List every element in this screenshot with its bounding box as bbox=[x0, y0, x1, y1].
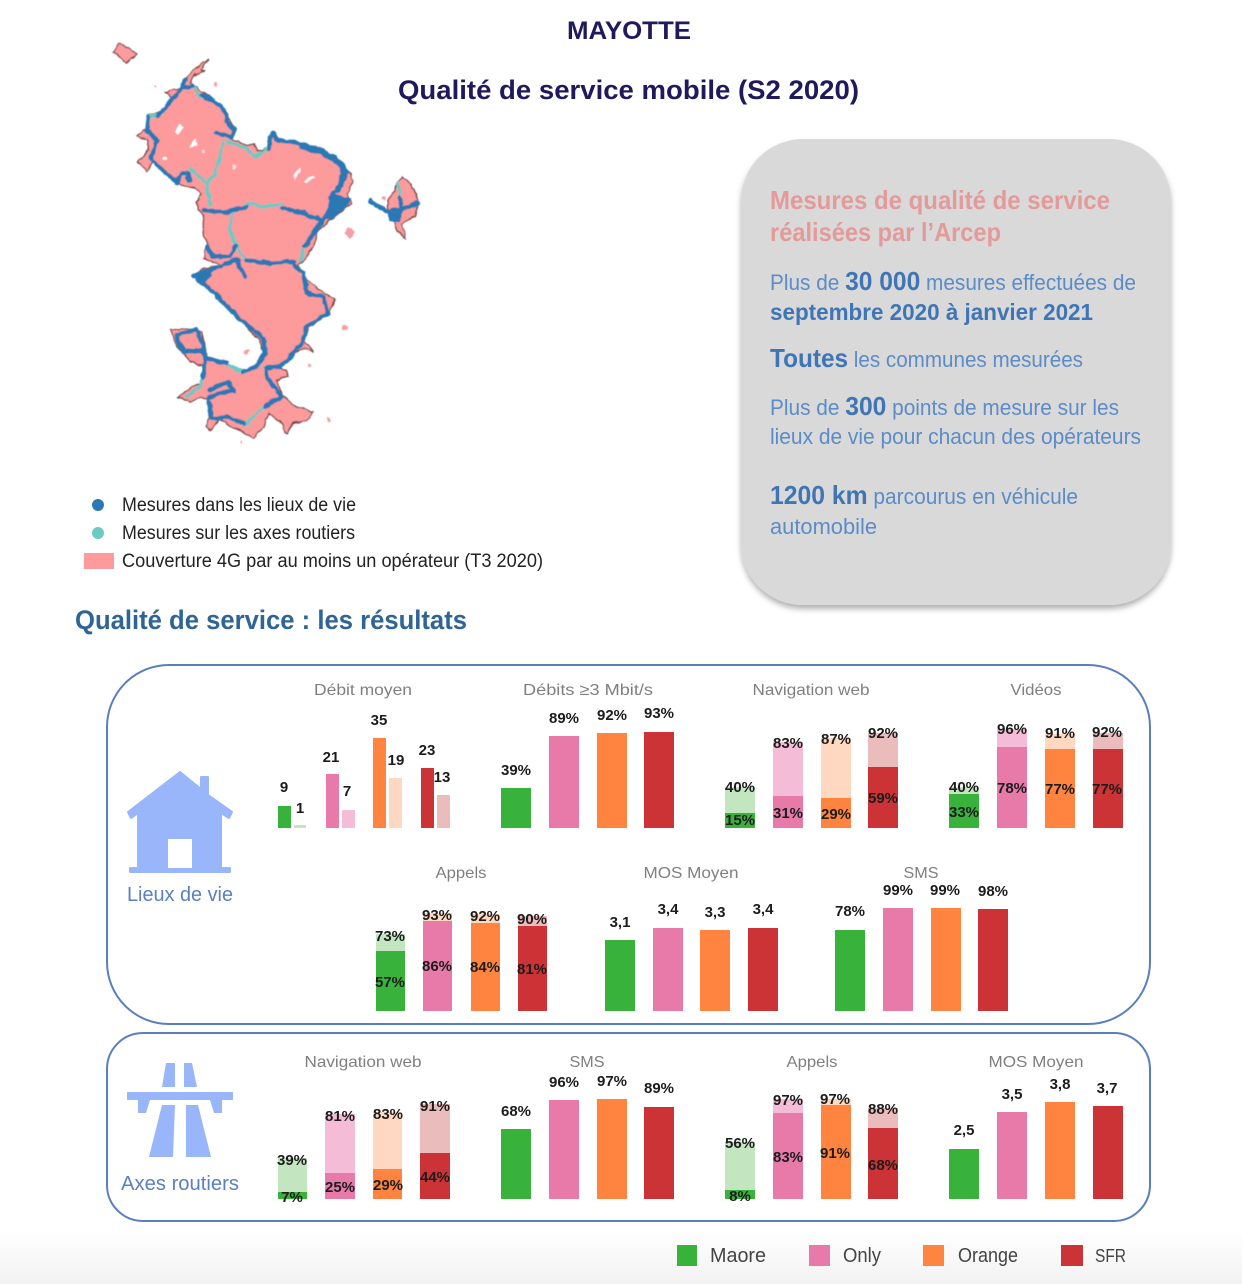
chart: MOS Moyen bbox=[605, 865, 778, 1011]
chart: Navigation web routes bbox=[277, 1054, 450, 1206]
chart: Vidéos bbox=[949, 682, 1123, 828]
road measurements bbox=[148, 87, 400, 425]
chart: MOS Moyen: 3,1 bbox=[610, 914, 630, 931]
chart: Navigation web routes: 39% bbox=[277, 1152, 307, 1169]
chart: Débit moyen: 7 bbox=[343, 783, 351, 800]
white gaps in coverage bbox=[163, 124, 316, 184]
chart: MOS Moyen routes: 2,5 bbox=[954, 1122, 974, 1139]
chart: Appels: 92% bbox=[470, 908, 500, 925]
chart: Vidéos: 78% bbox=[997, 780, 1027, 797]
chart: Débits 3 Mbit/s: 89% bbox=[549, 710, 579, 727]
chart: MOS Moyen routes: 3,5 bbox=[1002, 1086, 1022, 1103]
chart: Navigation web bbox=[725, 682, 898, 829]
chart: Débit moyen: 21 bbox=[323, 749, 339, 766]
chart: Appels: Appels bbox=[436, 865, 486, 882]
chart: Appels routes: 91% bbox=[820, 1145, 850, 1162]
chart: Appels: 84% bbox=[470, 959, 500, 976]
chart: Appels bbox=[375, 865, 547, 1011]
legend: 4G coverage: Couverture 4G par au moins un opérateur (T3 2020) bbox=[122, 551, 543, 572]
chart: Appels: 90% bbox=[517, 911, 547, 928]
chart: Appels routes: 97% bbox=[773, 1092, 803, 1109]
legend: SFR: SFR bbox=[1095, 1246, 1126, 1266]
chart: Navigation web routes: 91% bbox=[420, 1098, 450, 1115]
chart: Vidéos: 96% bbox=[997, 721, 1027, 738]
chart: Débits 3 Mbit/s: Débits ≥3 Mbit/s bbox=[523, 682, 653, 699]
label: Axes routiers: Axes routiers bbox=[121, 1173, 239, 1195]
chart: Navigation web: 87% bbox=[821, 731, 851, 748]
legend: roads: Mesures sur les axes routiers bbox=[122, 523, 355, 544]
panel: lieux de vie bbox=[107, 665, 1150, 1024]
chart: Vidéos: Vidéos bbox=[1010, 682, 1062, 699]
chart: MOS Moyen routes: MOS Moyen bbox=[988, 1054, 1084, 1071]
chart: SMS: 98% bbox=[978, 883, 1008, 900]
chart: Appels routes: 56% bbox=[725, 1135, 755, 1152]
chart: Appels routes bbox=[725, 1054, 898, 1205]
chart: Navigation web: 31% bbox=[773, 805, 803, 822]
chart: Appels routes: 88% bbox=[868, 1101, 898, 1118]
chart: Navigation web routes: 81% bbox=[325, 1108, 355, 1125]
chart: SMS routes: SMS bbox=[570, 1054, 604, 1071]
legend: Only: Only bbox=[843, 1245, 881, 1267]
chart: Vidéos: 77% bbox=[1045, 781, 1075, 798]
chart: Navigation web: 83% bbox=[773, 735, 803, 752]
fact: 30 000 measurements bbox=[770, 266, 1136, 325]
chart: Navigation web: Navigation web bbox=[752, 682, 870, 699]
chart: Appels routes: 8% bbox=[729, 1188, 751, 1205]
chart: Navigation web routes: 83% bbox=[373, 1106, 403, 1123]
icon: house bbox=[128, 772, 232, 872]
fact: 300 points: lieux de vie pour chacun des opérateurs bbox=[770, 424, 1141, 449]
chart: Navigation web routes: 44% bbox=[420, 1169, 450, 1186]
chart: Vidéos: 33% bbox=[949, 804, 979, 821]
legend: living places: Mesures dans les lieux de vie bbox=[122, 495, 356, 516]
chart: Débits 3 Mbit/s: 39% bbox=[501, 762, 531, 779]
chart: Navigation web routes: Navigation web bbox=[304, 1054, 422, 1071]
chart: Navigation web routes: 7% bbox=[281, 1189, 303, 1206]
chart: Navigation web: 59% bbox=[868, 790, 898, 807]
chart: MOS Moyen: 3,4 bbox=[658, 901, 679, 918]
chart: Appels: 93% bbox=[422, 907, 452, 924]
chart: Appels routes: Appels bbox=[786, 1054, 838, 1071]
chart: SMS routes: 68% bbox=[501, 1103, 531, 1120]
main island coverage bbox=[137, 59, 353, 438]
chart: Appels routes: 68% bbox=[868, 1157, 898, 1174]
chart: Débit moyen: 1 bbox=[296, 800, 304, 817]
chart: Débit moyen: 23 bbox=[419, 742, 435, 759]
chart: Navigation web: 40% bbox=[725, 779, 755, 796]
icon: motorway bbox=[127, 1063, 233, 1157]
fact: all communes: Toutes les communes mesurées bbox=[770, 343, 1083, 373]
chart: Débits 3 Mbit/s bbox=[501, 682, 674, 828]
map of Mayotte bbox=[113, 43, 418, 444]
legend: Orange bbox=[923, 1245, 1018, 1267]
chart: Navigation web routes: 29% bbox=[373, 1177, 403, 1194]
chart: SMS routes: 97% bbox=[597, 1073, 627, 1090]
chart: MOS Moyen: MOS Moyen bbox=[644, 865, 738, 882]
title: Mayotte: MAYOTTE bbox=[567, 17, 691, 45]
chart: Navigation web: 15% bbox=[725, 812, 755, 829]
chart: Débit moyen: 13 bbox=[434, 769, 450, 786]
chart: MOS Moyen routes: 3,8 bbox=[1050, 1076, 1070, 1093]
chart: Appels routes: 97% bbox=[820, 1091, 850, 1108]
chart: MOS Moyen: 3,3 bbox=[705, 904, 725, 921]
chart: SMS bbox=[835, 865, 1008, 1011]
chart: Appels: 57% bbox=[375, 974, 405, 991]
chart: SMS: 99% bbox=[930, 882, 960, 899]
section heading: Qualité de service : les résultats bbox=[75, 605, 467, 635]
chart: Appels: 73% bbox=[375, 928, 405, 945]
chart: SMS routes: 89% bbox=[644, 1080, 674, 1097]
chart: Appels routes: 83% bbox=[773, 1149, 803, 1166]
chart: MOS Moyen routes bbox=[949, 1054, 1123, 1199]
panel heading: Mesures de qualité de service bbox=[770, 185, 1110, 215]
legend: SFR bbox=[1061, 1245, 1126, 1266]
small islets bbox=[154, 82, 387, 444]
fact: 30 000 measurements: Plus de 30 000 mesures effectuées de bbox=[770, 266, 1136, 296]
chart: Vidéos: 92% bbox=[1092, 724, 1122, 741]
fact: 300 points bbox=[770, 391, 1141, 449]
chart: SMS routes: 96% bbox=[549, 1074, 579, 1091]
chart: Débit moyen: 9 bbox=[280, 779, 288, 796]
legend: Maore bbox=[677, 1245, 766, 1267]
chart: Vidéos: 40% bbox=[949, 779, 979, 796]
map legend bbox=[84, 495, 543, 572]
Petite-Terre bbox=[387, 176, 418, 238]
subtitle: Qualité de service mobile (S2 2020) bbox=[398, 75, 859, 105]
chart: Appels: 81% bbox=[517, 961, 547, 978]
islet north-west bbox=[113, 43, 137, 63]
chart: Débit moyen bbox=[278, 682, 450, 828]
chart: Débit moyen: 19 bbox=[388, 752, 404, 769]
chart: Débit moyen: Débit moyen bbox=[314, 682, 412, 699]
fact: 300 points: Plus de 300 points de mesure sur les bbox=[770, 391, 1119, 421]
chart: Débits 3 Mbit/s: 93% bbox=[644, 705, 674, 722]
chart: SMS routes bbox=[501, 1054, 674, 1199]
panel: Arcep measurements bbox=[741, 139, 1171, 605]
panel heading: réalisées par l’Arcep bbox=[770, 217, 1001, 247]
chart: SMS: SMS bbox=[904, 865, 938, 882]
chart: SMS: 78% bbox=[835, 903, 865, 920]
fact: 1200 km bbox=[770, 480, 1078, 539]
chart: Navigation web: 29% bbox=[821, 806, 851, 823]
living-place measurements bbox=[147, 80, 418, 423]
chart: Vidéos: 77% bbox=[1092, 781, 1122, 798]
operator legend bbox=[677, 1245, 1126, 1267]
legend: Only bbox=[809, 1245, 881, 1267]
panel heading bbox=[770, 185, 1110, 247]
chart: Débit moyen: 35 bbox=[371, 712, 387, 729]
fact: 30 000 measurements: septembre 2020 à janvier 2021 bbox=[770, 299, 1093, 325]
chart: Appels: 86% bbox=[422, 958, 452, 975]
chart: SMS: 99% bbox=[883, 882, 913, 899]
chart: Navigation web: 92% bbox=[868, 725, 898, 742]
chart: MOS Moyen routes: 3,7 bbox=[1097, 1080, 1117, 1097]
chart: Débits 3 Mbit/s: 92% bbox=[597, 707, 627, 724]
panel: axes routiers bbox=[107, 1033, 1150, 1221]
label: Lieux de vie: Lieux de vie bbox=[127, 884, 233, 906]
chart: MOS Moyen: 3,4 bbox=[753, 901, 774, 918]
legend: Maore: Maore bbox=[710, 1245, 766, 1267]
chart: Vidéos: 91% bbox=[1045, 725, 1075, 742]
chart: Navigation web routes: 25% bbox=[325, 1179, 355, 1196]
legend: Orange: Orange bbox=[958, 1245, 1018, 1267]
fact: 1200 km: 1200 km parcourus en véhicule bbox=[770, 480, 1078, 510]
fact: 1200 km: automobile bbox=[770, 514, 877, 539]
